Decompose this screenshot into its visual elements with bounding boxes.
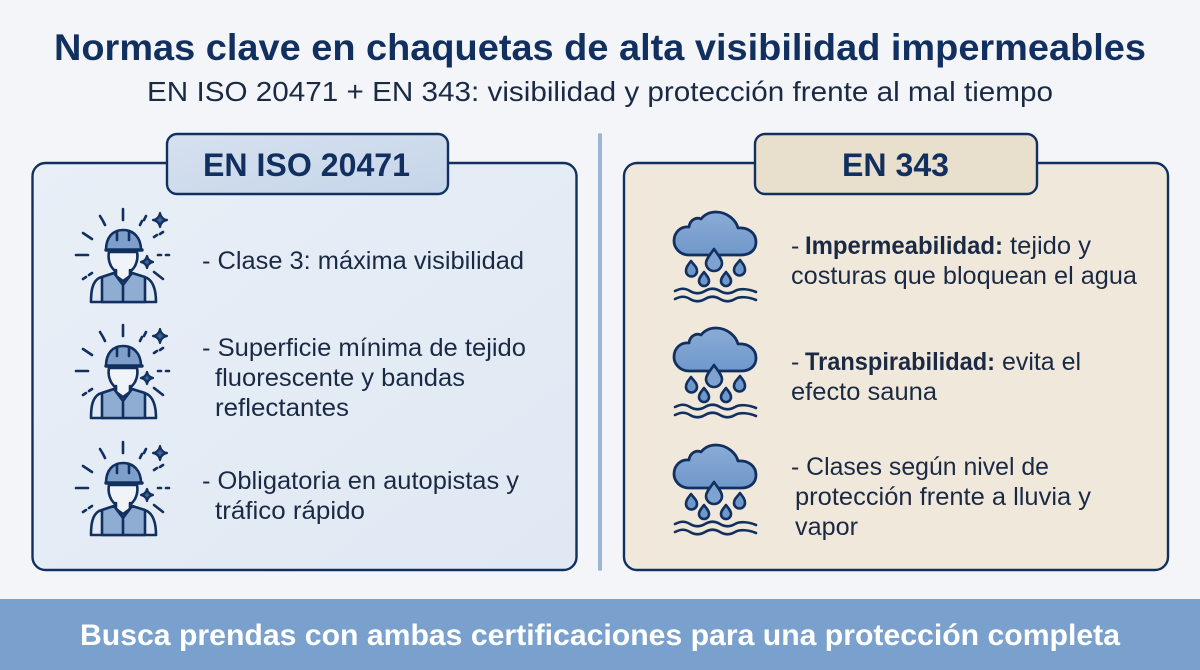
text: obligatoria: tráfico rápido (215, 497, 365, 525)
icon: worker 1 (76, 209, 169, 302)
panel: EN ISO 20471 (32, 134, 576, 570)
footer banner (0, 599, 1200, 670)
text: superficie minima: - Superficie mínima de tejido (202, 334, 526, 362)
text: impermeabilidad: - (791, 232, 806, 260)
icon: worker 3 (76, 442, 169, 535)
text: impermeabilidad: Impermeabilidad: (805, 232, 1003, 260)
text: impermeabilidad: tejido y (1010, 232, 1092, 260)
text: impermeabilidad: costuras que bloquean el agua (791, 262, 1137, 290)
text: superficie minima: reflectantes (215, 394, 349, 422)
icon: rain 2 (674, 328, 756, 417)
text: clases: - Clases según nivel de (791, 453, 1049, 481)
text: transpirabilidad: - (791, 348, 806, 376)
icon: worker 2 (76, 325, 169, 418)
subtitle: EN ISO 20471 + EN 343: visibilidad y protección frente al mal tiempo (147, 76, 1053, 107)
heading tab: EN ISO 20471 (167, 134, 448, 194)
heading tab: EN 343 (755, 134, 1037, 194)
heading tab: EN ISO 20471: EN ISO 20471 (203, 147, 410, 183)
heading tab: EN 343: EN 343 (842, 147, 949, 183)
panel: EN 343 (624, 134, 1168, 570)
footer banner: Busca prendas con ambas certificaciones para una protección completa (80, 619, 1120, 652)
text: clases: vapor (795, 513, 858, 541)
icon: rain 1 (674, 212, 756, 301)
text: clase 3: - Clase 3: máxima visibilidad (202, 247, 524, 275)
text: clases: protección frente a lluvia y (795, 483, 1092, 511)
text: transpirabilidad: Transpirabilidad: (805, 348, 995, 376)
text: superficie minima: fluorescente y bandas (215, 364, 465, 392)
text: transpirabilidad: efecto sauna (791, 378, 937, 406)
icon: rain 3 (674, 445, 756, 534)
divider (598, 133, 602, 571)
text: obligatoria: - Obligatoria en autopistas y (202, 467, 520, 495)
text: transpirabilidad: evita el (1002, 348, 1081, 376)
title: Normas clave en chaquetas de alta visibilidad impermeables (54, 27, 1146, 68)
